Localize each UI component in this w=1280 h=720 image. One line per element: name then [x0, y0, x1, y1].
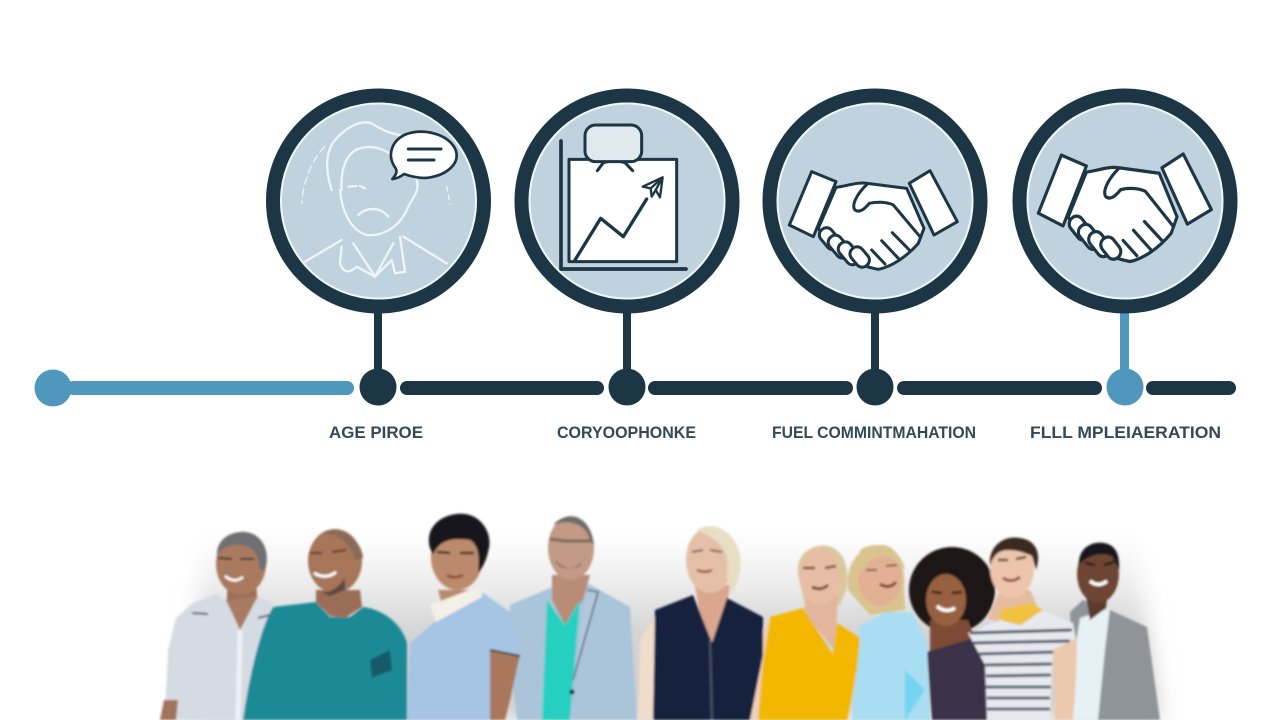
- timeline: [34, 304, 1236, 406]
- person 6: woman in yellow: [758, 545, 860, 720]
- group of people photo: [160, 514, 1160, 720]
- milestone 1 marker: [360, 312, 396, 406]
- milestone 3 marker: [856, 312, 894, 406]
- person 10: man in grey suit: [1070, 543, 1160, 720]
- shadow backdrop: [185, 535, 1160, 720]
- timeline dark segments: [400, 381, 1236, 395]
- timeline start dot and blue segment: [34, 370, 354, 406]
- person 1: grey shirt man: [160, 532, 280, 720]
- person 4: man in light blue blazer: [510, 516, 637, 720]
- person 5: blonde woman in navy vest: [638, 526, 770, 720]
- speech bubble: [391, 132, 457, 179]
- milestone label 4: FLLL MPLEIAERATION: [1030, 423, 1221, 442]
- person 8: woman with afro: [909, 547, 995, 720]
- milestone 2 marker: [608, 312, 646, 406]
- person 9: woman in striped tee: [968, 537, 1077, 720]
- person 7: blonde woman in sky blue: [848, 545, 930, 720]
- circle icon: growth chart with speech bubble: [522, 96, 732, 306]
- circle icon: person with speech bubble: [273, 96, 484, 306]
- circle icon: handshake large: [1020, 96, 1230, 306]
- milestone label 1: AGE PIROE: [329, 423, 423, 442]
- milestone 4 marker: [1106, 304, 1144, 406]
- person 3: man in blue tee: [407, 514, 520, 720]
- milestone label 2: CORYOOPHONKE: [557, 423, 696, 442]
- person 2: bald man in teal: [243, 529, 407, 720]
- milestone label 3: FUEL COMMINTMAHATION: [772, 423, 976, 442]
- circle icon: handshake: [770, 96, 980, 306]
